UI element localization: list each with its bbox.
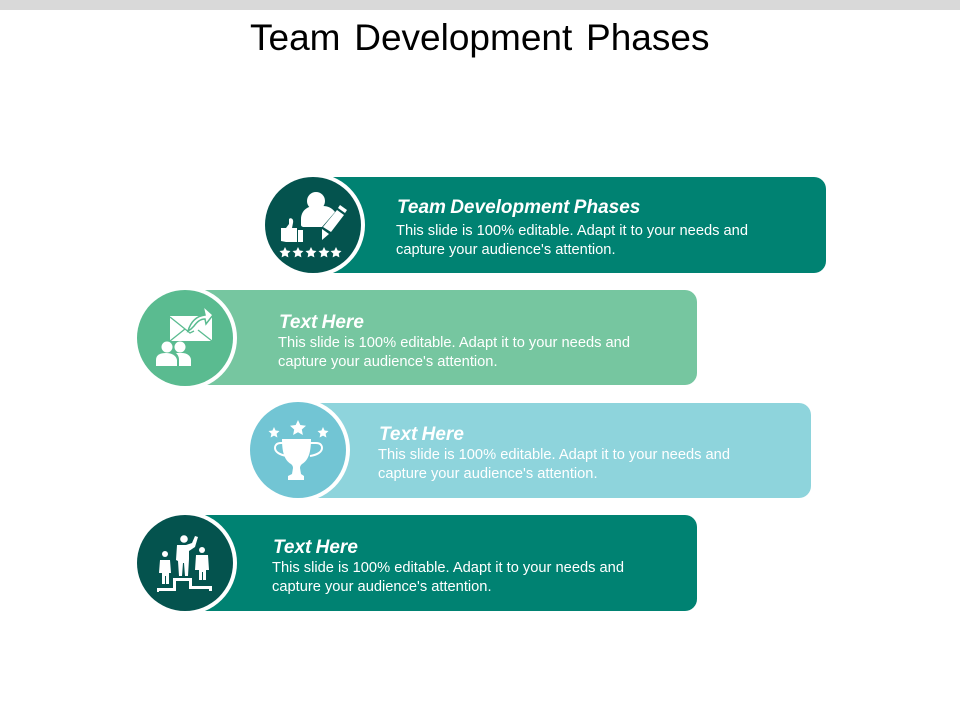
circle 2: [133, 286, 237, 390]
text block 1: [396, 197, 748, 258]
icon: envelope, arrow and people: [156, 306, 213, 366]
bar 3: [315, 403, 811, 498]
bar 4: [200, 515, 697, 611]
body 3: [378, 447, 730, 482]
top band: [0, 0, 960, 10]
text block 2: [278, 312, 630, 370]
heading 3: Text Here: [379, 424, 464, 445]
heading 4: Text Here: [273, 537, 358, 558]
bar 1: [330, 177, 826, 273]
heading 1: Team Development Phases: [397, 197, 640, 218]
bar 2: [200, 290, 697, 385]
icon: trophy and stars: [268, 420, 328, 480]
body 4: capture your audience's attention.: [272, 579, 492, 595]
body 1: capture your audience's attention.: [396, 242, 616, 258]
circle 3: [246, 398, 350, 502]
body 2: capture your audience's attention.: [278, 354, 498, 370]
heading 2: Text Here: [279, 312, 364, 333]
body 1: [396, 223, 748, 258]
text block 4: [272, 537, 624, 595]
title: Team Development Phases: [250, 17, 709, 58]
body 3: capture your audience's attention.: [378, 466, 598, 482]
body 3: This slide is 100% editable. Adapt it to your needs and: [378, 447, 730, 463]
body 4: [272, 560, 624, 595]
body 4: This slide is 100% editable. Adapt it to your needs and: [272, 560, 624, 576]
body 2: This slide is 100% editable. Adapt it to your needs and: [278, 335, 630, 351]
circle 4: [133, 511, 237, 615]
icon: person, thumb, pencil and stars: [280, 192, 347, 257]
body 2: [278, 335, 630, 370]
body 1: This slide is 100% editable. Adapt it to your needs and: [396, 223, 748, 239]
circle 1: [261, 173, 365, 277]
icon: podium with people: [157, 535, 212, 592]
text block 3: [378, 424, 730, 482]
